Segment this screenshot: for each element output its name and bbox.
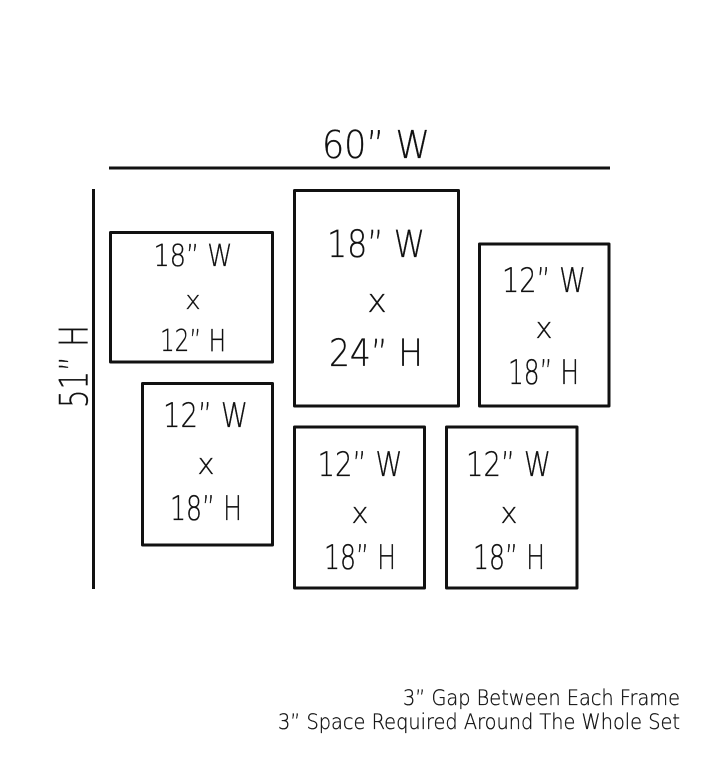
frame: 18 W x 12 H: 18” W <box>154 239 232 274</box>
frame: 12 W x 18 H bottom right: 18” H <box>473 538 545 578</box>
frame: 12 W x 18 H left: 18” H <box>170 489 242 529</box>
frame: 18 W x 12 H: 12” H <box>160 324 226 359</box>
footnote: 3” Gap Between Each Frame <box>403 686 680 710</box>
footnote: 3” Space Required Around The Whole Set <box>278 710 680 734</box>
frame: 12 W x 18 H left: x <box>197 447 215 481</box>
frame: 12 W x 18 H bottom centre: x <box>351 496 369 530</box>
footnote <box>278 686 680 734</box>
frame: 12 W x 18 H left <box>142 384 272 545</box>
frame: 12 W x 18 H bottom centre <box>294 427 424 588</box>
width dimension <box>109 123 610 170</box>
frame: 18 W x 12 H <box>110 232 272 362</box>
frame: 12 W x 18 H right <box>480 244 609 406</box>
frame: 12 W x 18 H bottom right: x <box>500 496 518 530</box>
frame: 12 W x 18 H bottom right <box>446 427 577 588</box>
frame: 12 W x 18 H right: 18” H <box>508 353 579 393</box>
frame: 12 W x 18 H bottom centre: 12” W <box>318 445 402 485</box>
frame: 12 W x 18 H right: x <box>535 311 553 345</box>
height dimension: 51” H <box>52 325 98 408</box>
frame: 12 W x 18 H bottom right: 12” W <box>466 445 551 485</box>
frame: 12 W x 18 H bottom centre: 18” H <box>324 538 396 578</box>
frame: 18 W x 12 H: x <box>185 286 201 316</box>
width dimension: 60” W <box>322 123 430 167</box>
frame: 18 W x 24 H: 18” W <box>327 223 425 266</box>
frame: 12 W x 18 H right: 12” W <box>502 261 586 301</box>
frame: 18 W x 24 H: 24” H <box>329 332 423 375</box>
frame: 18 W x 24 H <box>294 190 458 406</box>
frame: 18 W x 24 H: x <box>367 281 387 320</box>
frame: 12 W x 18 H left: 12” W <box>163 396 248 436</box>
height dimension <box>52 189 98 589</box>
